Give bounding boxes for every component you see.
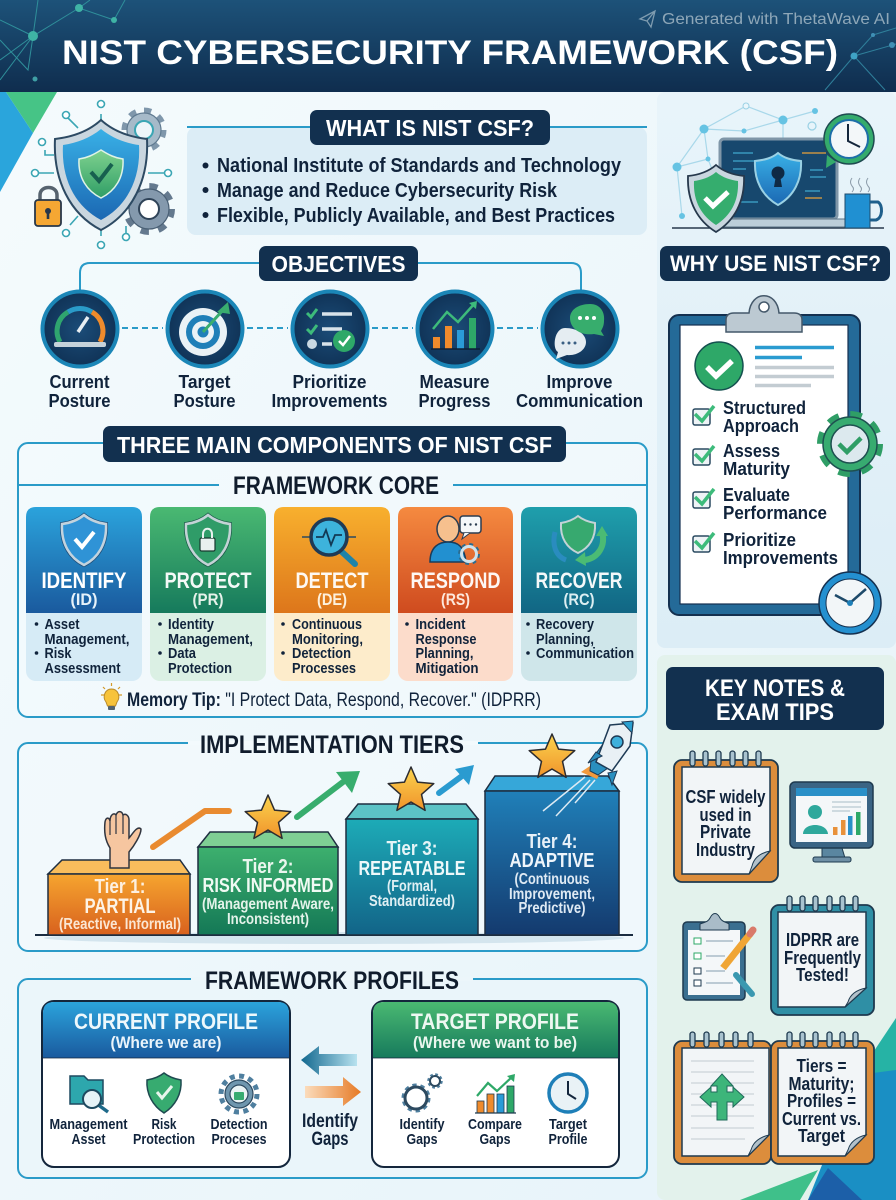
- target profile labels: Gaps: [406, 1131, 438, 1148]
- icon: measure progress chart: [418, 292, 492, 366]
- checklist item 2: Assess: [723, 441, 780, 461]
- tier 3 block: REPEATABLE: [358, 858, 466, 880]
- note: CSF widely used: used in: [700, 805, 752, 825]
- icon: checklist clipboard with pencil: [683, 914, 753, 1000]
- tier 3 block: (Formal,: [387, 878, 437, 895]
- objective labels: Improvements: [272, 391, 388, 411]
- card: identify: Risk: [44, 646, 72, 662]
- card: detect: (DE): [317, 590, 347, 609]
- card: detect: Monitoring,: [292, 632, 363, 648]
- heading: what is NIST CSF: [310, 110, 550, 145]
- corner decoration: top left triangles: [0, 92, 57, 192]
- panel: implementation tiers: [18, 721, 647, 951]
- network decoration left: [0, 0, 125, 82]
- bullet list: Manage and Reduce Cybersecurity Risk: [217, 180, 558, 202]
- clipboard clip: [726, 296, 802, 332]
- heading: why use NIST CSF: WHY USE NIST CSF?: [670, 251, 881, 276]
- heading: key notes and exam tips: KEY NOTES &: [705, 675, 845, 702]
- card: identify: Management,: [44, 632, 130, 648]
- card: recover: Recovery: [536, 617, 594, 633]
- tier 4 block: Predictive): [518, 900, 586, 917]
- icon: star tier 3: [388, 767, 434, 810]
- card: respond: Incident: [416, 617, 466, 633]
- tier 1 block: (Reactive, Informal): [59, 916, 181, 933]
- tier 2 block: RISK INFORMED: [202, 875, 334, 897]
- tier 4 block: Tier 4:: [526, 831, 578, 853]
- notebook rings: [690, 1032, 753, 1047]
- title: NIST CYBERSECURITY FRAMEWORK (CSF): [62, 34, 838, 72]
- card: identify: [26, 507, 142, 681]
- note: tiers and profiles: Target: [798, 1126, 845, 1146]
- checklist item 1: Structured: [723, 398, 806, 418]
- objective labels: Improve: [546, 372, 612, 392]
- bullet list: [202, 155, 622, 227]
- card: respond: Response: [416, 632, 476, 648]
- card: identify: (ID): [70, 590, 98, 609]
- memory tip: Memory Tip: "I Protect Data, Respond, Recover." (IDPRR): [127, 690, 541, 711]
- target profile labels: Gaps: [480, 1131, 510, 1148]
- panel: key notes background: [657, 655, 896, 1200]
- note: tiers and profiles: Current vs.: [782, 1109, 861, 1129]
- card: recover: (RC): [564, 590, 594, 609]
- note: CSF widely used: Private: [700, 822, 751, 842]
- note: CSF widely used: [674, 751, 778, 882]
- panel: framework profiles: [18, 967, 647, 1178]
- tier 2 block: (Management Aware,: [202, 896, 334, 913]
- heading: why use NIST CSF: [660, 246, 890, 281]
- current profile card: CURRENT PROFILE: [74, 1009, 258, 1034]
- section: objectives: [42, 246, 643, 411]
- icon: rocket: [543, 721, 633, 816]
- icon: green shield: [147, 1073, 181, 1113]
- heading: framework core: FRAMEWORK CORE: [233, 472, 439, 500]
- card: protect: (PR): [192, 590, 224, 609]
- clipboard: why use NIST CSF: [669, 296, 881, 634]
- checklist item 3: Evaluate: [723, 485, 790, 505]
- shield: [55, 120, 147, 230]
- heading: key notes and exam tips: [666, 667, 884, 730]
- card: protect: Protection: [168, 661, 232, 677]
- card: protect: Management,: [168, 632, 253, 648]
- heading: key notes and exam tips: EXAM TIPS: [716, 699, 834, 726]
- note: CSF widely used: Industry: [696, 840, 755, 860]
- checklist item 4: [693, 530, 838, 568]
- current profile labels: Detection: [210, 1116, 268, 1133]
- card: recover: [521, 507, 637, 681]
- target profile card: TARGET PROFILE: [411, 1009, 579, 1034]
- heading: three main components: THREE MAIN COMPONENTS OF NIST CSF: [117, 432, 552, 458]
- card: detect: Detection: [292, 646, 351, 662]
- icon: green check gear: [822, 416, 878, 472]
- target profile card: [372, 1001, 619, 1167]
- icon: recovery shield with arrows: [554, 516, 608, 566]
- objective labels: Posture: [48, 391, 110, 411]
- icon: large check badge: [695, 342, 743, 390]
- card: identify: IDENTIFY: [42, 568, 127, 593]
- lower gear: [127, 187, 171, 231]
- note: IDPRR frequently tested: [771, 896, 874, 1015]
- card: detect: Continuous: [292, 617, 362, 633]
- note: cross arrows: [674, 1032, 771, 1164]
- tier 2 block: Tier 2:: [242, 856, 294, 878]
- icon: four-way arrow: [700, 1074, 744, 1120]
- card: identify: Asset: [44, 617, 80, 633]
- icon: current posture gauge: [42, 292, 118, 366]
- heading: three main components: [103, 426, 566, 462]
- tier 4 block: Improvement,: [509, 886, 595, 903]
- current profile labels: Management: [50, 1116, 128, 1133]
- heading: objectives: [259, 246, 418, 281]
- corner decoration: bottom right triangles: [740, 1018, 896, 1200]
- card: respond: Planning,: [416, 646, 474, 662]
- current profile card: [42, 1001, 290, 1167]
- current profile labels: Risk: [152, 1116, 177, 1133]
- objective labels: Measure: [420, 372, 490, 392]
- card: protect: Identity: [168, 617, 214, 633]
- note: tiers and profiles: Profiles =: [787, 1091, 856, 1111]
- icon: star tier 4: [529, 734, 575, 777]
- target profile labels: Identify: [400, 1116, 445, 1133]
- icon: magnifier with pulse: [302, 519, 356, 564]
- icon: raised hand: [105, 812, 141, 868]
- note: CSF widely used: CSF widely: [686, 787, 766, 807]
- heading: implementation tiers: IMPLEMENTATION TIERS: [200, 731, 464, 759]
- checklist item 3: [693, 485, 827, 523]
- illustration: laptop with shield, clock and mug: [672, 103, 884, 232]
- tier 4 block: (Continuous: [514, 871, 590, 888]
- tier 3 block: [346, 804, 478, 935]
- card: respond: (RS): [441, 590, 470, 609]
- card: detect: DETECT: [296, 568, 369, 593]
- icon: light bulb: [101, 683, 122, 710]
- tier 1 block: [48, 860, 190, 935]
- card: recover: Communication: [536, 646, 634, 662]
- icon: gears: [404, 1075, 441, 1110]
- card: respond: Mitigation: [416, 661, 478, 677]
- icon: protect shield: [186, 515, 230, 565]
- icon: prioritize checklist: [292, 292, 368, 366]
- note: tiers and profiles: [771, 1032, 874, 1164]
- upper gear: [125, 111, 163, 149]
- target profile labels: Profile: [548, 1131, 588, 1148]
- heading: what is NIST CSF: WHAT IS NIST CSF?: [326, 115, 534, 141]
- padlock: [35, 188, 61, 226]
- tier 3 block: Tier 3:: [386, 838, 438, 860]
- bullet list: National Institute of Standards and Technology: [217, 155, 622, 177]
- current profile card: (Where we are): [110, 1033, 222, 1052]
- current profile labels: [50, 1116, 268, 1148]
- card: detect: Processes: [292, 661, 356, 677]
- target profile labels: Target: [549, 1116, 587, 1133]
- icon: gear with lock: [221, 1076, 257, 1112]
- card: detect: [274, 507, 390, 681]
- icon: clock: [549, 1074, 587, 1112]
- note: IDPRR frequently tested: IDPRR are: [786, 930, 859, 950]
- current profile labels: Proceses: [212, 1131, 266, 1148]
- icon: star tier 2: [245, 795, 291, 838]
- card: recover: Planning,: [536, 632, 594, 648]
- card: identify: Assessment: [44, 661, 121, 677]
- checklist item 1: [693, 398, 806, 436]
- objective labels: Communication: [516, 391, 643, 411]
- icon: laptop side shield: [688, 165, 744, 232]
- card: protect: Data: [168, 646, 197, 662]
- arrow: tier 2 to tier 3: [297, 771, 360, 817]
- icon: monitor with person and chart: [790, 782, 873, 862]
- target profile labels: [400, 1116, 588, 1148]
- arrows: identify gaps: [301, 1046, 361, 1150]
- panel: right column background: [657, 92, 896, 648]
- icon: improve communication bubbles: [542, 292, 618, 366]
- memory tip: [101, 683, 541, 711]
- watermark: Generated with ThetaWave AI: [662, 11, 890, 28]
- icon: folder with magnifier: [70, 1076, 108, 1112]
- target profile labels: Compare: [468, 1116, 522, 1133]
- header banner: [0, 0, 896, 92]
- target profile card: (Where we want to be): [413, 1033, 577, 1052]
- arrow: tier 1 to tier 2: [153, 811, 229, 847]
- objective labels: Current: [50, 372, 110, 392]
- checklist item 3: Performance: [723, 503, 827, 523]
- checklist item 4: Improvements: [723, 548, 838, 568]
- tier 1 block: PARTIAL: [84, 895, 156, 918]
- card: protect: PROTECT: [164, 568, 252, 593]
- arrow: tier 3 to tier 4: [439, 765, 474, 793]
- card: recover: RECOVER: [536, 568, 623, 593]
- tier 2 block: [198, 832, 338, 935]
- notebook rings: [690, 751, 761, 766]
- bullet list: Flexible, Publicly Available, and Best Practices: [217, 205, 615, 227]
- icon: coffee mug: [845, 178, 882, 228]
- tier 3 block: Standardized): [369, 893, 455, 910]
- note: tiers and profiles: Tiers =: [796, 1056, 846, 1076]
- ground line: [35, 932, 633, 944]
- tier 1 block: Tier 1:: [94, 876, 146, 898]
- note: IDPRR frequently tested: Tested!: [796, 965, 849, 985]
- card: respond: [398, 507, 513, 681]
- objective labels: Posture: [174, 391, 236, 411]
- panel: what is NIST CSF: [187, 110, 647, 235]
- icon: blue clock: [819, 572, 881, 634]
- current profile labels: Protection: [133, 1131, 195, 1148]
- objective labels: Target: [178, 372, 230, 392]
- icon: shield with gears, lock and circuit: [32, 100, 172, 248]
- icon: target posture: [168, 292, 242, 366]
- icon: identify shield: [62, 515, 106, 565]
- network decoration right: [825, 28, 896, 90]
- card: protect: [150, 507, 266, 681]
- notebook rings: [787, 896, 858, 911]
- card: respond: RESPOND: [410, 568, 500, 593]
- objective labels: Prioritize: [292, 372, 366, 392]
- arrows: identify gaps: Identify: [302, 1111, 358, 1132]
- heading: objectives: OBJECTIVES: [272, 251, 406, 277]
- heading: framework profiles: FRAMEWORK PROFILES: [205, 967, 459, 995]
- icon: compare chart: [475, 1074, 516, 1113]
- icon: person with gear and chat: [430, 516, 481, 563]
- checklist item 2: [693, 441, 790, 479]
- objective labels: [48, 372, 643, 411]
- panel: three main components, framework core: [18, 426, 647, 717]
- tier 4 block: ADAPTIVE: [510, 850, 594, 872]
- objective labels: Progress: [418, 391, 490, 411]
- checklist item 1: Approach: [723, 416, 799, 436]
- tier 4 block: [485, 776, 619, 935]
- checklist item 4: Prioritize: [723, 530, 796, 550]
- arrows: identify gaps: Gaps: [312, 1129, 348, 1150]
- current profile labels: Asset: [72, 1131, 106, 1148]
- notebook rings: [787, 1032, 858, 1047]
- icon: clock bubble: [824, 114, 874, 168]
- note: tiers and profiles: Maturity;: [788, 1074, 854, 1094]
- tier 2 block: Inconsistent): [227, 911, 309, 928]
- checklist item 2: Maturity: [723, 459, 790, 479]
- note: IDPRR frequently tested: Frequently: [784, 948, 861, 968]
